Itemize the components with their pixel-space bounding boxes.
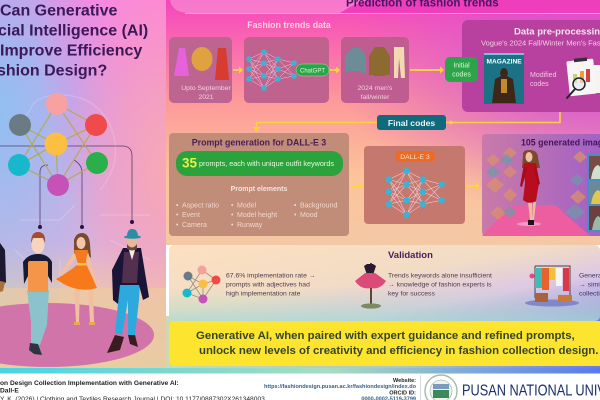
prompt element list: • — [294, 202, 297, 210]
text: generated images finding — [579, 272, 600, 298]
icon: dress form — [355, 263, 386, 309]
text: trends keywords finding: Trends keywords alone insufficient — [388, 272, 492, 280]
university seal — [420, 375, 457, 400]
main title — [0, 2, 148, 80]
panel: 105 generated images — [482, 134, 600, 236]
initial codes label: codes — [452, 72, 471, 78]
prompt element list: Event — [182, 212, 200, 219]
figure: man with teal hat and jacket — [107, 229, 149, 353]
neural network of coloured nodes — [8, 93, 108, 196]
footer links: Website: — [393, 378, 416, 384]
initial codes label: Initial — [453, 62, 470, 70]
circuit connector lines — [0, 146, 134, 229]
figure: man in orange shirt — [23, 232, 52, 355]
right panel background — [166, 0, 600, 245]
panel: ChatGPT neural network — [244, 37, 329, 103]
bottom colour strip — [0, 368, 600, 374]
text: trends keywords finding: → knowledge of fashion experts is — [388, 282, 492, 288]
arrow to DALL-E panel — [351, 182, 363, 190]
main title: cial Intelligence (AI) — [0, 22, 148, 40]
prompt element list: Mood — [300, 212, 318, 219]
panel: prompt generation for DALL-E 3: Prompt generation for DALL-E 3 — [192, 138, 326, 148]
conclusion banner: unlock new levels of creativity and efficiency in fashion collection design. — [199, 345, 598, 357]
prompt element list: • — [231, 202, 234, 210]
panel: clothes up to September 2021: Upto September — [181, 85, 231, 92]
panel: 2024 men's fall/winter clothes — [341, 37, 409, 103]
icon: small node network — [182, 266, 220, 304]
prompt element list: • — [176, 202, 179, 210]
prompt count pill: 35 — [182, 156, 198, 170]
footer links: https://fashiondesign.pusan.ac.kr/fashiondesign/index.do — [264, 384, 417, 390]
text: implementation rate finding: 67.6% implementation rate → — [226, 272, 316, 280]
prompt element list: • — [176, 212, 179, 219]
footer citation: Dall-E — [0, 388, 19, 394]
panel: DALL-E 3 neural network: DALL-E 3 — [400, 154, 430, 161]
prompt element list: Model — [237, 202, 257, 210]
prompt element list: • — [231, 222, 234, 229]
prompt element list: Background — [300, 202, 337, 210]
panel: data pre-processing — [462, 20, 600, 112]
background below validation panel — [166, 316, 600, 368]
main title: shion Design? — [0, 62, 107, 80]
figure: model in red dress — [517, 150, 541, 226]
text: trends keywords finding: key for success — [388, 290, 435, 298]
prompt element list — [176, 202, 337, 229]
panel: data pre-processing: codes — [530, 81, 549, 88]
main title: Improve Efficiency — [0, 42, 142, 60]
prompt count pill: prompts, each with unique outfit keywords — [199, 159, 334, 168]
text: trends keywords finding — [388, 272, 492, 298]
prompt element list: • — [294, 212, 297, 219]
footer citation: on Design Collection Implementation with Generative AI: — [0, 380, 179, 387]
footer links — [264, 378, 417, 400]
heading band: prediction of fashion trends — [170, 0, 600, 13]
arrow to generated images panel — [466, 182, 480, 190]
left panel background — [0, 0, 166, 373]
text: implementation rate finding: high implementation rate — [226, 290, 301, 298]
figure: partial person at left edge — [0, 243, 6, 292]
initial codes label — [445, 57, 478, 82]
text: implementation rate finding — [226, 272, 316, 298]
panel: DALL-E 3 neural network — [364, 146, 465, 224]
panel: ChatGPT neural network: ChatGPT — [300, 68, 325, 74]
prompt element list: • — [231, 212, 234, 219]
prompt element list: Camera — [182, 222, 207, 229]
panel: clothes up to September 2021: 2021 — [198, 94, 214, 101]
prompt element list: Model height — [237, 212, 277, 219]
conclusion banner: Generative AI, when paired with expert guidance and refined prompts, — [196, 330, 575, 342]
footer background — [0, 374, 600, 400]
panel: 2024 men's fall/winter clothes: fall/winter — [361, 94, 390, 101]
panel: 2024 men's fall/winter clothes: 2024 men's — [358, 85, 393, 92]
prompt count pill — [176, 151, 343, 176]
panel: data pre-processing: Modified — [530, 72, 557, 79]
runway ellipse — [0, 303, 154, 367]
heading: fashion trends data: Fashion trends data — [247, 20, 331, 30]
prompt element list: Aspect ratio — [182, 202, 219, 210]
generated image thumbnails — [587, 153, 600, 232]
main title: Can Generative — [0, 2, 117, 20]
panel: prompt generation for DALL-E 3: Prompt elements — [231, 186, 288, 193]
conclusion banner — [169, 321, 600, 366]
footer citation — [0, 380, 265, 400]
final codes label: Final codes — [388, 118, 435, 128]
icon: magazine cover — [484, 53, 524, 104]
figure: woman in orange dress — [56, 233, 97, 325]
final codes label — [377, 115, 446, 130]
panel: validation — [169, 245, 600, 321]
icon: magazine cover: MAGAZINE — [486, 58, 522, 66]
icon: clipboard with magnifier — [566, 57, 600, 98]
connector arrows around final codes — [252, 112, 560, 132]
icon: clothing rack — [525, 266, 579, 306]
prompt element list: • — [176, 222, 179, 229]
text: implementation rate finding: prompts with adjectives had — [226, 282, 310, 288]
panel: prompt generation for DALL-E 3 — [169, 133, 349, 236]
footer links: ORCID ID: — [389, 390, 416, 396]
prompt element list: Runway — [237, 222, 263, 229]
panel: validation: Validation — [388, 250, 433, 261]
panel: clothes up to September 2021 — [169, 37, 232, 103]
arrows between fashion data panels — [233, 66, 444, 74]
